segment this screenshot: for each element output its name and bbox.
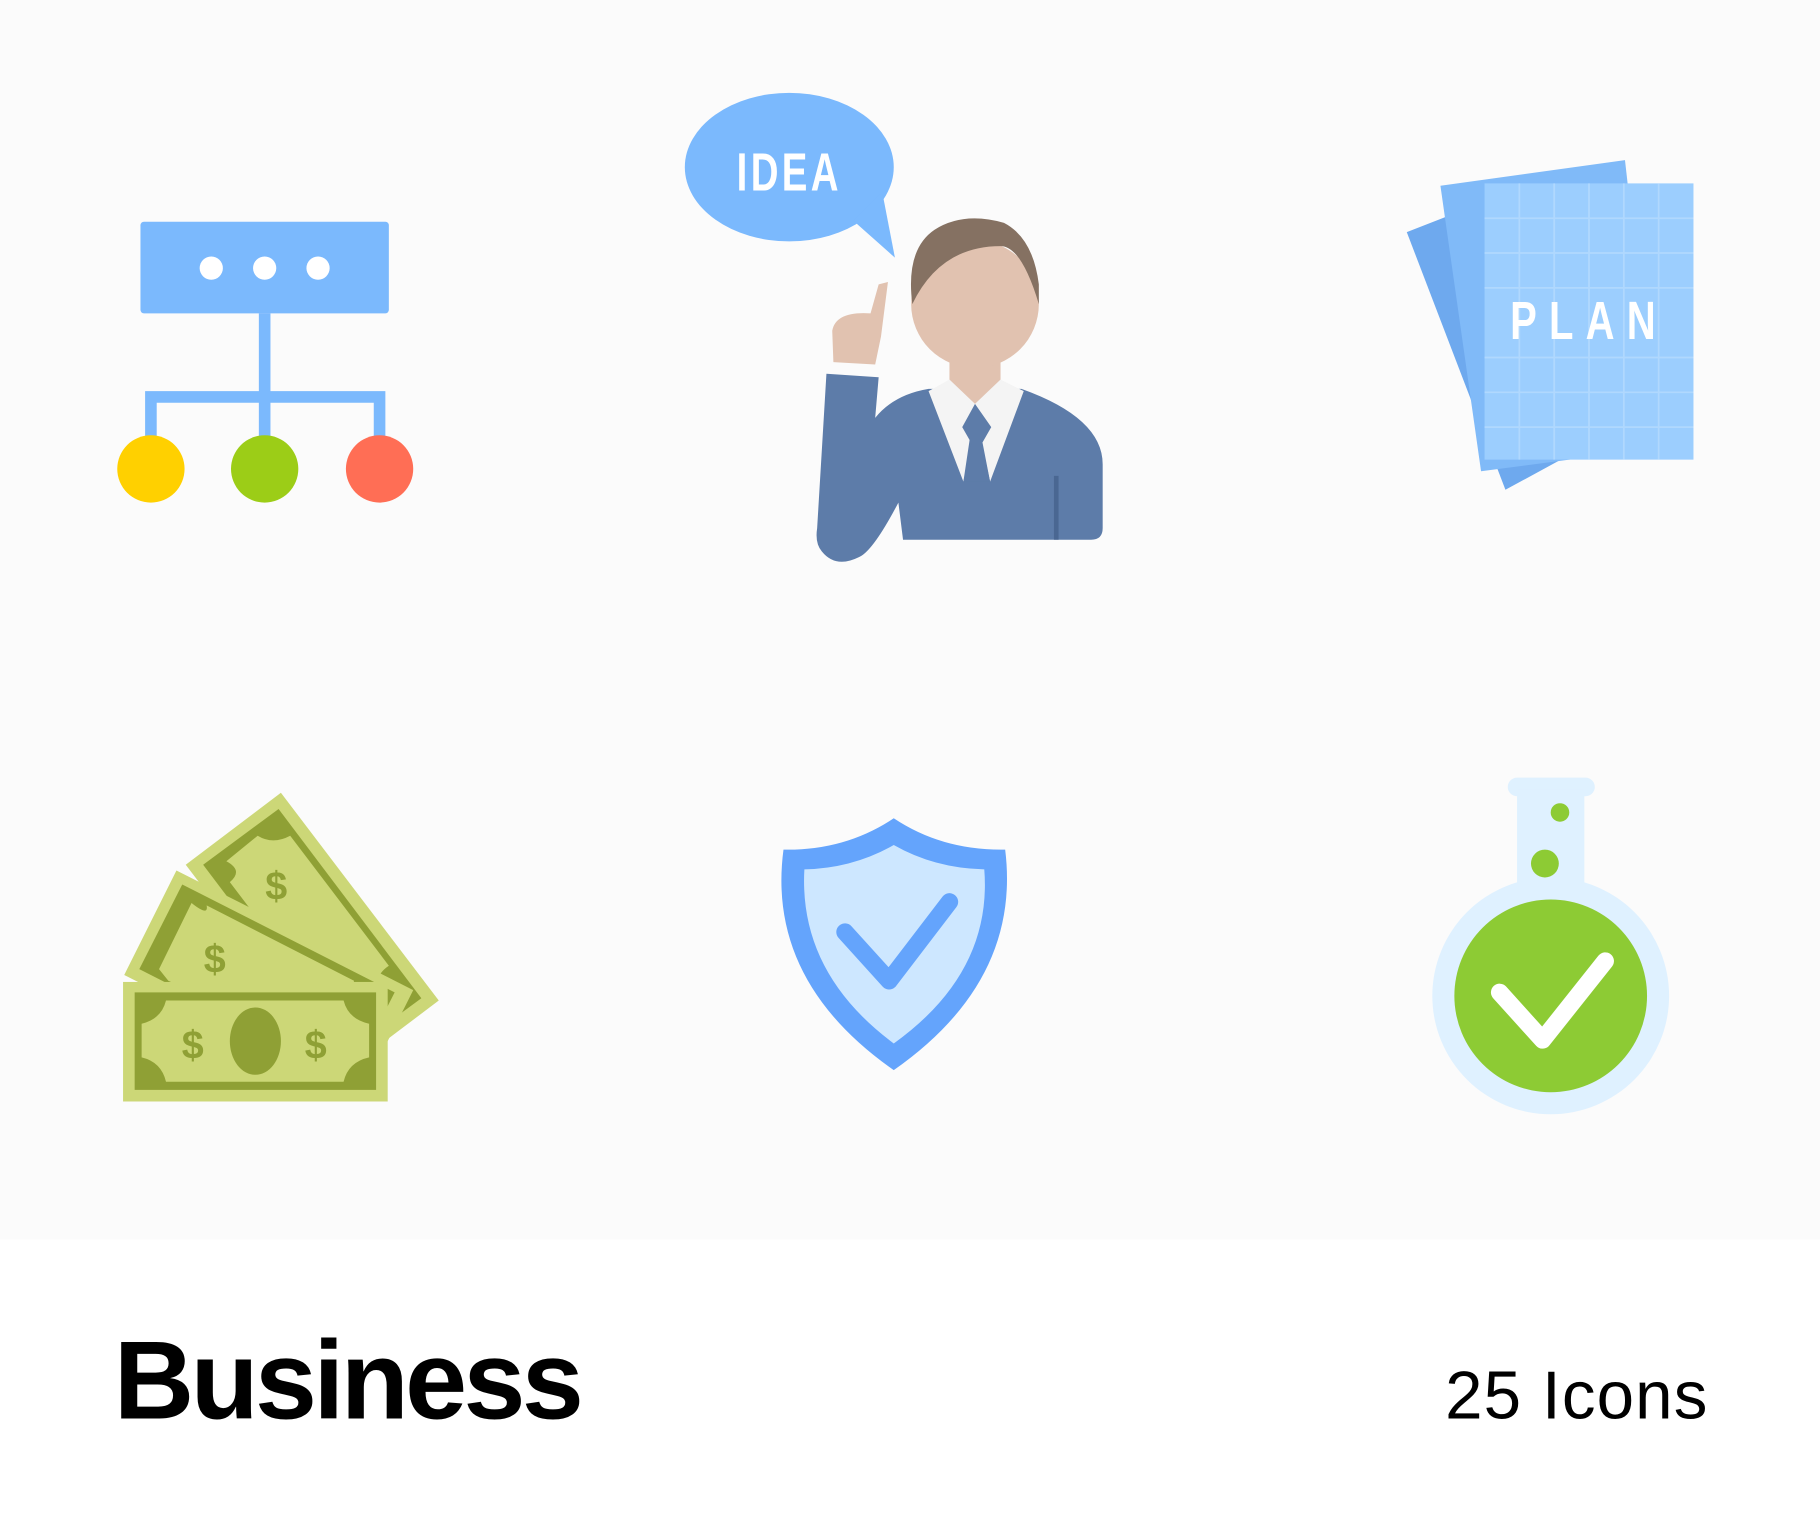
icon: shield [781, 818, 1007, 1070]
icon: idea person: IDEA [737, 142, 842, 202]
icon: money: $ [204, 938, 226, 982]
icon: money: $ [265, 865, 287, 909]
icon: money [123, 793, 439, 1101]
icon: flask [1432, 778, 1669, 1114]
icon: money: $ [182, 1024, 204, 1068]
title: Business [114, 1317, 584, 1442]
icon: money: $ [305, 1024, 327, 1068]
icon: plan documents [1407, 160, 1693, 490]
icon: hierarchy [117, 222, 413, 503]
icon count: 25 Icons [1445, 1358, 1707, 1433]
icon: idea person [685, 93, 1103, 562]
icon: plan documents: PLAN [1510, 291, 1668, 351]
